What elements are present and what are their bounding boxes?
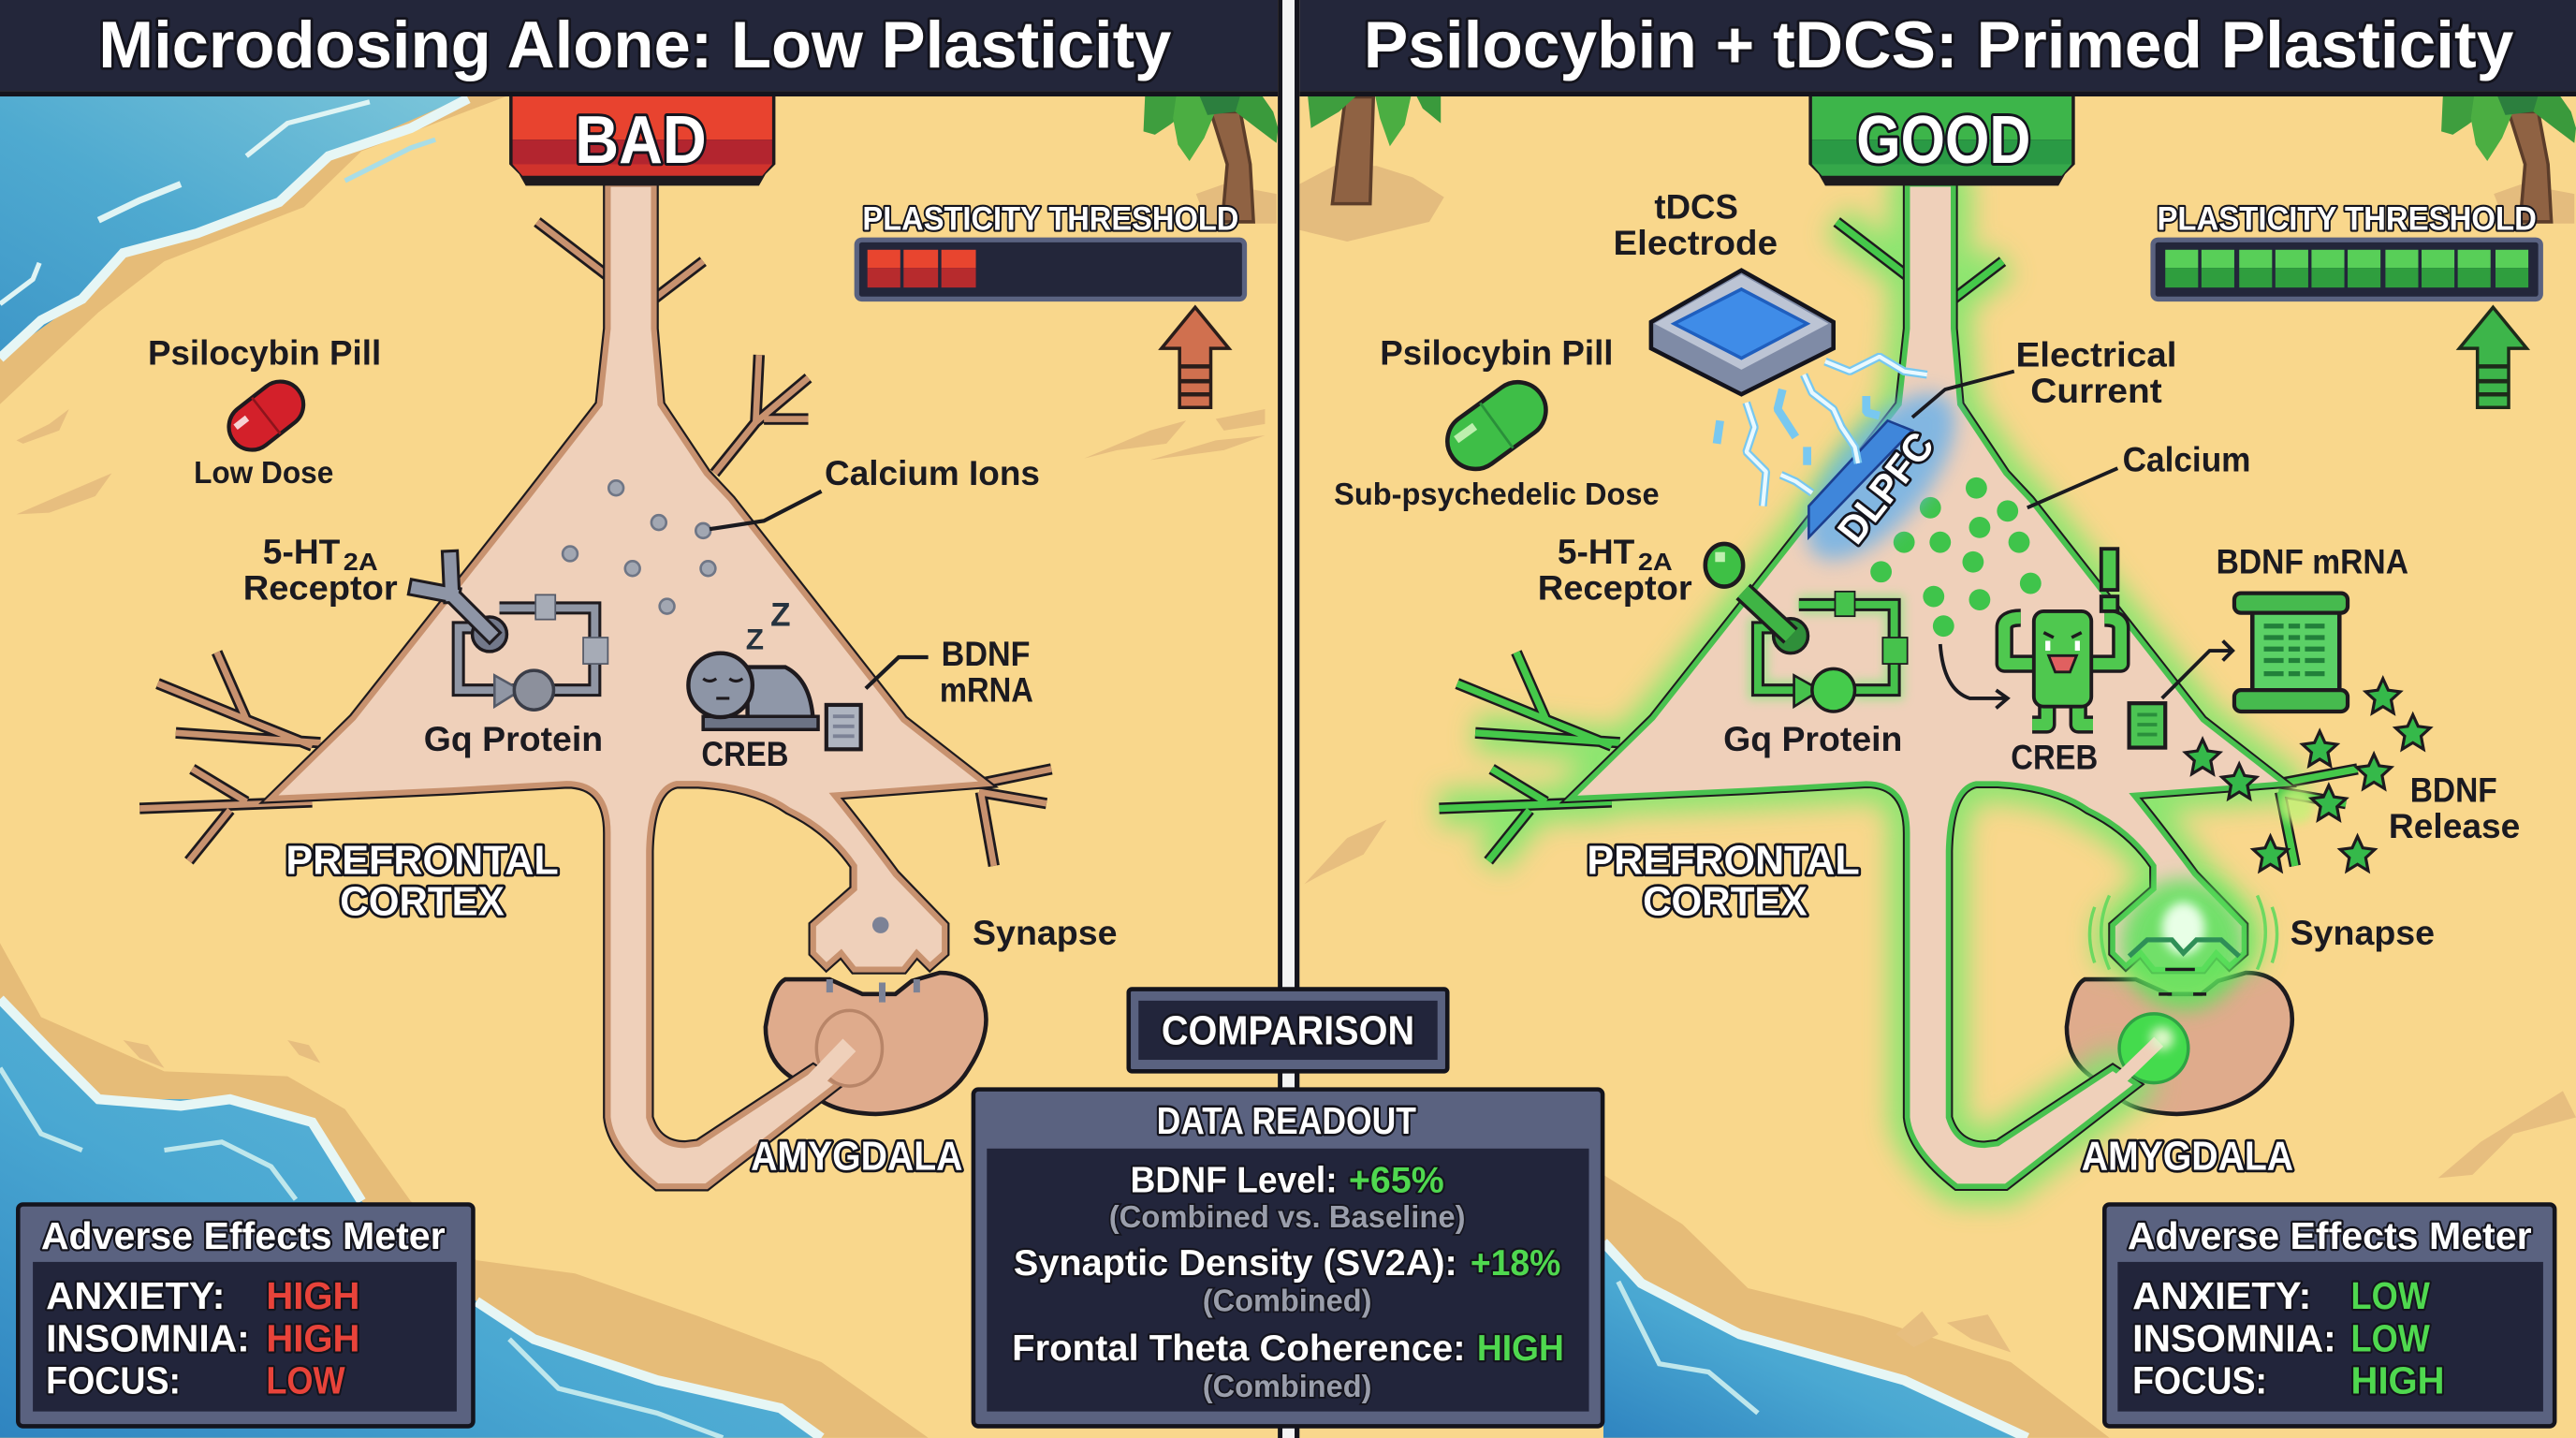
right panel labels: tDCS bbox=[1654, 187, 1738, 226]
sand streaks bbox=[17, 409, 2576, 1352]
left panel labels: 5-HT bbox=[263, 533, 341, 571]
header: right bbox=[1299, 0, 2576, 96]
panel: adverse effects meter right: LOW bbox=[2351, 1274, 2431, 1317]
calcium ions bbox=[563, 480, 715, 614]
BDNF release stars bbox=[2186, 679, 2430, 871]
right panel diagram: neuron bbox=[1439, 184, 2430, 1186]
right panel labels: Receptor bbox=[1538, 569, 1692, 608]
electrical current bolts bbox=[1717, 357, 1927, 506]
arrow: threshold up, red bbox=[1162, 307, 1229, 407]
BDNF level row bbox=[1109, 1160, 1466, 1235]
palm tree: right panel right bbox=[2441, 95, 2576, 224]
dendrites bbox=[1439, 222, 2358, 866]
sign: GOOD bbox=[1808, 95, 2075, 185]
frontal theta row: Frontal Theta Coherence: bbox=[1012, 1328, 1466, 1369]
glowing synapse bbox=[2089, 879, 2277, 1010]
panel: adverse effects meter right: Adverse Effects Meter bbox=[2128, 1214, 2532, 1257]
BDNF mRNA scroll (grey) bbox=[827, 705, 861, 749]
left panel labels: Calcium Ions bbox=[825, 454, 1040, 492]
dendrites bbox=[139, 222, 1051, 866]
panel: adverse effects meter left: Adverse Effects Meter bbox=[41, 1214, 446, 1257]
plasticity threshold: low bbox=[856, 201, 1244, 299]
amygdala bbox=[766, 973, 986, 1114]
dendrite tip glow bbox=[2278, 787, 2315, 823]
sleeping CREB bbox=[688, 597, 818, 729]
right panel labels: Release bbox=[2389, 807, 2520, 845]
comparison tag bbox=[1129, 990, 1447, 1071]
Gq protein loop bbox=[459, 594, 607, 710]
synaptic density row: (Combined) bbox=[1203, 1284, 1372, 1319]
plasticity threshold: high: PLASTICITY THRESHOLD bbox=[2157, 201, 2537, 238]
right panel labels: Electrical bbox=[2016, 335, 2177, 374]
panel: adverse effects meter left bbox=[18, 1204, 473, 1426]
right panel labels bbox=[1334, 187, 2520, 1180]
right panel labels: Calcium bbox=[2123, 441, 2250, 479]
left panel diagram: neuron bbox=[139, 184, 1051, 1186]
bar segments bbox=[2165, 250, 2528, 287]
palm tree: right panel left bbox=[1299, 95, 1444, 242]
tDCS electrode bbox=[1651, 271, 1834, 394]
synaptic vesicle bbox=[872, 917, 889, 933]
beach: bottom left water bbox=[0, 943, 929, 1438]
icon: green pill bbox=[1437, 371, 1557, 480]
right panel labels: Synapse bbox=[2291, 914, 2435, 952]
beach: top left water bbox=[0, 95, 509, 404]
right panel labels: AMYGDALA bbox=[2082, 1134, 2293, 1180]
left panel labels: 2A bbox=[344, 548, 378, 576]
DLPFC patch bbox=[1780, 369, 1982, 584]
center divider bbox=[1278, 0, 1299, 1438]
right panel labels: Sub-psychedelic Dose bbox=[1334, 477, 1660, 512]
right panel labels: Psilocybin Pill bbox=[1380, 334, 1614, 373]
plasticity threshold: high bbox=[2153, 201, 2540, 299]
left panel labels: Gq Protein bbox=[424, 720, 603, 758]
panel: adverse effects meter left: HIGH bbox=[266, 1317, 359, 1360]
left panel labels: BDNF bbox=[942, 635, 1030, 673]
soma and axon bbox=[1571, 184, 2285, 1186]
frontal theta row: HIGH bbox=[1477, 1328, 1564, 1369]
panel: adverse effects meter right: INSOMNIA: bbox=[2132, 1317, 2336, 1360]
panel: adverse effects meter right: ANXIETY: bbox=[2132, 1274, 2311, 1317]
left panel labels: Synapse bbox=[973, 914, 1117, 952]
right panel labels: 5-HT bbox=[1558, 533, 1635, 571]
green glow bbox=[1439, 184, 2285, 1186]
small scroll bbox=[2130, 703, 2165, 748]
DLPFC patch: DLPFC bbox=[1829, 424, 1942, 551]
right panel labels: BDNF mRNA bbox=[2217, 543, 2408, 581]
bar segments bbox=[868, 250, 976, 287]
Gq protein loop green bbox=[1758, 592, 1908, 712]
plasticity threshold: low: PLASTICITY THRESHOLD bbox=[862, 201, 1238, 238]
header: left bbox=[0, 0, 1278, 96]
right panel labels: CORTEX bbox=[1643, 879, 1808, 925]
leader lines bbox=[710, 492, 929, 688]
right panel labels: Electrode bbox=[1614, 224, 1778, 262]
right panel labels: Gq Protein bbox=[1723, 720, 1902, 758]
panel: adverse effects meter right: FOCUS: bbox=[2132, 1358, 2267, 1401]
sleeping CREB: Z bbox=[770, 597, 791, 634]
left panel labels: Psilocybin Pill bbox=[148, 334, 381, 373]
sleeping CREB: Z bbox=[746, 622, 764, 655]
synaptic density row bbox=[1014, 1243, 1560, 1319]
frontal theta row: (Combined) bbox=[1203, 1370, 1372, 1404]
header: right: Psilocybin + tDCS: Primed Plasticity bbox=[1364, 7, 2513, 81]
beach: bottom right water bbox=[1603, 1175, 2110, 1438]
amygdala bbox=[2067, 973, 2292, 1114]
sign: BAD: BAD bbox=[575, 103, 707, 178]
panel: adverse effects meter left: HIGH bbox=[266, 1274, 359, 1317]
BDNF mRNA scroll (green) bbox=[2234, 594, 2348, 712]
right panel labels: BDNF bbox=[2410, 770, 2497, 809]
panel: adverse effects meter left: ANXIETY: bbox=[46, 1274, 225, 1317]
synaptic density row: +18% bbox=[1471, 1243, 1560, 1284]
arrow: threshold up, green bbox=[2459, 307, 2526, 407]
panel: adverse effects meter left: FOCUS: bbox=[46, 1358, 181, 1401]
comparison tag: COMPARISON bbox=[1162, 1007, 1414, 1053]
frontal theta row bbox=[1012, 1328, 1564, 1404]
BDNF level row: (Combined vs. Baseline) bbox=[1109, 1200, 1466, 1235]
panel: adverse effects meter left: LOW bbox=[266, 1358, 345, 1401]
soma and axon bbox=[271, 184, 986, 1186]
header: left: Microdosing Alone: Low Plasticity bbox=[98, 7, 1171, 81]
left panel labels: CORTEX bbox=[340, 879, 505, 925]
panel: adverse effects meter right: HIGH bbox=[2351, 1358, 2445, 1401]
BDNF level row: +65% bbox=[1349, 1160, 1444, 1200]
5-HT2A receptor green bbox=[1705, 544, 1791, 636]
axon terminal glowing bbox=[2111, 1014, 2188, 1088]
panel: adverse effects meter right bbox=[2104, 1204, 2554, 1426]
CREB flexing character bbox=[2004, 611, 2121, 725]
right panel labels: Current bbox=[2030, 372, 2162, 410]
exclamation mark bbox=[2101, 549, 2117, 611]
palm tree: left panel bbox=[1144, 95, 1278, 224]
left panel labels: PREFRONTAL bbox=[285, 838, 559, 884]
arrows and leader lines bbox=[1912, 372, 2232, 708]
5-HT2A receptor bbox=[417, 559, 490, 633]
right panel labels: PREFRONTAL bbox=[1587, 838, 1860, 884]
left panel labels bbox=[148, 334, 1117, 1180]
panel: adverse effects meter left: INSOMNIA: bbox=[46, 1317, 250, 1360]
sign: GOOD: GOOD bbox=[1856, 103, 2030, 178]
left panel labels: CREB bbox=[701, 735, 788, 773]
axon terminal bbox=[805, 1010, 882, 1091]
right panel labels: CREB bbox=[2011, 738, 2098, 776]
panel: adverse effects meter right: LOW bbox=[2351, 1317, 2431, 1360]
panel: data readout bbox=[973, 1090, 1603, 1426]
icon: red pill bbox=[220, 373, 313, 459]
left panel labels: AMYGDALA bbox=[751, 1134, 962, 1180]
left panel labels: Receptor bbox=[243, 569, 398, 608]
left panel labels: Low Dose bbox=[194, 456, 333, 491]
synaptic density row: Synaptic Density (SV2A): bbox=[1014, 1243, 1457, 1284]
panel: data readout: DATA READOUT bbox=[1157, 1099, 1416, 1142]
receptors at synapse bbox=[829, 979, 916, 1003]
BDNF level row: BDNF Level: bbox=[1131, 1160, 1338, 1200]
left panel labels: mRNA bbox=[940, 670, 1033, 709]
sign: BAD bbox=[509, 95, 775, 185]
calcium ions bbox=[1870, 477, 2042, 637]
right panel labels: 2A bbox=[1638, 548, 1673, 576]
